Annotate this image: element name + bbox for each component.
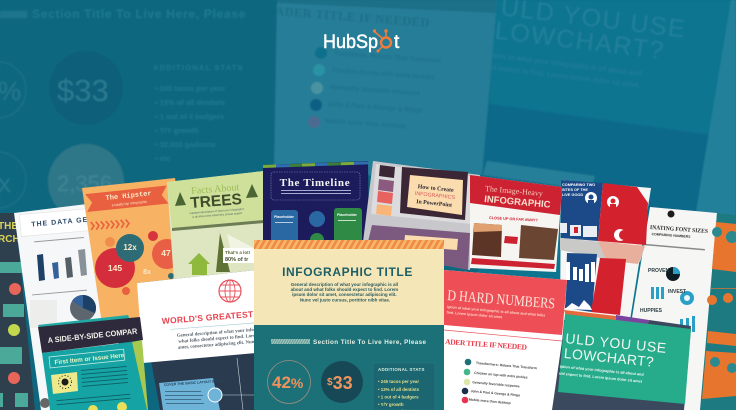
heading: iption of what your infographic is all about and — [559, 365, 645, 377]
section stripes — [271, 339, 310, 344]
heading: ULD YOU USE — [565, 330, 668, 356]
card: compare two (blue and red): COMPARING TWO — [562, 183, 595, 187]
background panel: middle template: Transform: Robots That Transform — [334, 50, 441, 65]
heading: A SIDE-BY-SIDE COMPAR — [47, 327, 138, 345]
icon: person red — [607, 196, 619, 208]
card: the hipster: 8x — [143, 269, 151, 276]
card: d hard numbers: iption of what your infographic is all about and what folks — [447, 305, 545, 318]
banner: The Hipster — [105, 190, 152, 203]
background panel: middle template: ADER TITLE IF NEEDED — [275, 4, 430, 30]
heading: uld expect to find. Lorem ipsum dolor sit amet — [559, 372, 643, 384]
background panel: middle template: Generally favorable response — [329, 84, 421, 97]
card: font sizes: PROVEN — [648, 268, 670, 274]
card: font sizes: HUPPIES — [640, 308, 663, 314]
heading: General description of what your infographic — [189, 207, 245, 215]
icon: person blue — [585, 192, 597, 204]
stat 42%: 42% — [272, 373, 304, 392]
card: the image-heavy infographic — [470, 175, 562, 272]
card: font sizes: INVEST — [668, 289, 686, 295]
heading: THE DATA GEEK — [31, 216, 100, 229]
card: the timeline: Placeholder — [274, 215, 295, 219]
slide title: How to Create — [417, 184, 454, 194]
heading: LOWCHART? — [563, 345, 655, 370]
list text: John & Paul & George & Ringo — [470, 389, 520, 397]
heading: D HARD NUMBERS — [447, 288, 556, 312]
background panel: middle template: John & Paul & George & Ringo — [327, 101, 423, 114]
card: the timeline: Placeholder — [337, 213, 358, 217]
blue callout: COVER THE BASIC LAYOUT IDEAS — [164, 379, 224, 387]
card: the hipster — [82, 178, 196, 345]
banner — [85, 186, 169, 212]
description: ipsum dolor sit amet, consectetur adipiscing elit. — [292, 292, 397, 297]
subheading: ADER TITLE IF NEEDED — [445, 337, 528, 352]
icon: globe — [219, 280, 241, 302]
heading: The Image-Heavy — [485, 184, 543, 198]
background panel: right template: ption of what your infographic is all about and — [489, 52, 642, 78]
list text: Mobile more than desktop — [469, 398, 511, 405]
background panel: left template: Section Title To Live Here, Please — [32, 7, 246, 21]
background panel: left template: • 1 out of 4 badgers — [155, 112, 224, 121]
card: world's greatest — [137, 270, 260, 410]
stat $33 — [321, 361, 363, 403]
list text — [469, 361, 537, 407]
card: the data geek — [14, 203, 130, 410]
background panel: middle template: Chicken on top with extra pickles — [332, 67, 435, 81]
card: d hard numbers — [441, 270, 567, 410]
card: how to create infographics in powerpoint — [362, 161, 480, 270]
small donut — [40, 398, 50, 408]
card: compare two (blue and red): SITES OF THE — [562, 188, 588, 192]
logo: HubSpot: t — [394, 32, 400, 53]
heading: amet, consectetur adipiscing elit. Nunc — [178, 340, 258, 351]
background panel: right template — [470, 0, 736, 410]
stat $33: $ — [327, 377, 333, 388]
icon: sprocket — [373, 29, 391, 52]
icon: house — [188, 253, 210, 275]
card: orange sections (right) — [700, 213, 736, 410]
body text lines — [54, 366, 131, 405]
card: the hipster: 47 — [161, 248, 171, 258]
background panel: left template: $33 — [57, 73, 109, 108]
heading: what folks should expect to find. Lorem — [178, 334, 259, 345]
card: should you use a flowchart — [552, 310, 691, 410]
card: facts about trees — [167, 171, 275, 310]
background panel: right template: LOWCHART? — [493, 17, 666, 65]
header panel — [254, 249, 444, 325]
timeline nodes — [271, 210, 298, 245]
description: General description of what your infographic is all — [291, 282, 398, 287]
background panel: left template: • etc — [155, 154, 171, 163]
card: flowchart (left dark) — [0, 213, 35, 410]
pie chart — [70, 295, 96, 321]
chevrons — [91, 219, 129, 230]
heading — [19, 208, 101, 237]
slide title: In PowerPoint — [416, 199, 452, 209]
card: compare two (blue and red): LIVE GOOD — [562, 193, 583, 197]
description: Nunc vel justo cursus, porttitor nibh vitae. — [300, 298, 390, 302]
heading — [559, 330, 668, 386]
heading: INFOGRAPHIC — [484, 194, 551, 211]
card: facts about trees: That's a lot! — [225, 250, 251, 255]
heading: is all about and what folks should expect — [192, 211, 243, 219]
icon: sun — [51, 372, 78, 394]
title: INFOGRAPHIC TITLE — [282, 265, 413, 279]
background panel: left template: 2,356 — [57, 171, 112, 196]
slide title — [414, 184, 456, 209]
photo right — [519, 225, 558, 260]
heading — [649, 225, 709, 240]
additional stats box — [373, 363, 435, 410]
card: facts about trees: 80% of tr — [225, 257, 249, 263]
list text: Chicken on top with extra pickles — [474, 371, 528, 380]
heading: COMPARING NUMBERS — [651, 232, 691, 239]
background panel: middle template — [274, 0, 497, 175]
heading: Facts About — [191, 182, 240, 197]
photo left — [472, 223, 502, 257]
list text: Transformers: Robots That Transform — [476, 361, 537, 370]
background panel: right template: uld expect to find. Lorem ipsum dolor sit amet, — [485, 64, 640, 90]
card: the timeline — [263, 161, 369, 247]
stat 42% — [268, 360, 310, 404]
card: the hipster: 12x — [123, 243, 137, 252]
heading: TREES — [190, 191, 243, 212]
description: about and what folks should expect to find. Lorem — [291, 287, 398, 292]
additional stats box: • 1 out of 4 badgers — [378, 394, 419, 400]
main card: infographic title — [254, 240, 444, 410]
bar chart — [37, 249, 87, 281]
charts — [666, 267, 680, 281]
heading: INATING FONT SIZES — [650, 225, 709, 235]
icon: trees — [175, 192, 186, 206]
heading: WORLD'S GREATEST — [161, 309, 254, 326]
background panel: left template — [0, 7, 246, 220]
item title box: First Item or Issue Here — [54, 352, 125, 366]
additional stats box: • 12% of all dentists — [378, 387, 420, 392]
additional stats box: • Y/Y growth — [378, 402, 404, 407]
background panel: left template: • 245 tacos per year — [155, 84, 225, 93]
stripe band — [254, 240, 444, 249]
card: the image-heavy infographic: CLOSE UP OR FAR AWAY? — [489, 216, 539, 223]
heading: The Timeline — [280, 177, 350, 189]
background panel: left template: ADDITIONAL STATS — [153, 63, 244, 72]
card: a side-by-side comparison — [38, 315, 148, 410]
heading — [187, 182, 245, 219]
additional stats box: • 245 tacos per year — [378, 379, 419, 384]
icon: tall tree — [216, 233, 230, 272]
stat $33: 33 — [333, 373, 353, 393]
slide title: INFOGRAPHICS — [415, 191, 456, 201]
banner: a totally hip infographic — [111, 200, 148, 207]
infographic thumbnails — [0, 161, 736, 410]
bubbles — [105, 237, 115, 247]
heading — [484, 184, 552, 211]
card: the hipster: 145 — [108, 263, 122, 273]
logo: HubSpot — [323, 29, 400, 53]
additional stats box: ADDITIONAL STATS — [378, 367, 425, 372]
background panel: middle template: Mobile more than desktop — [325, 118, 406, 130]
list text: Generally favorable response — [472, 380, 520, 388]
card: font sizes — [617, 207, 717, 410]
card: d hard numbers: find. Lorem ipsum dolor sit amet — [446, 310, 503, 319]
heading — [161, 309, 260, 352]
heading: General description of what your infogr — [177, 328, 259, 339]
text box — [30, 300, 57, 328]
background panel: left template: • 12% of all dentists — [155, 98, 225, 107]
background panel: left template: • Y/Y growth — [155, 126, 199, 135]
logo: HubSpot: HubSp — [323, 32, 378, 53]
background panel: left template: • 32,000 gadsons — [155, 140, 216, 149]
card: compare two (blue and red) — [560, 180, 651, 320]
section title: Section Title To Live Here, Please — [313, 339, 427, 346]
